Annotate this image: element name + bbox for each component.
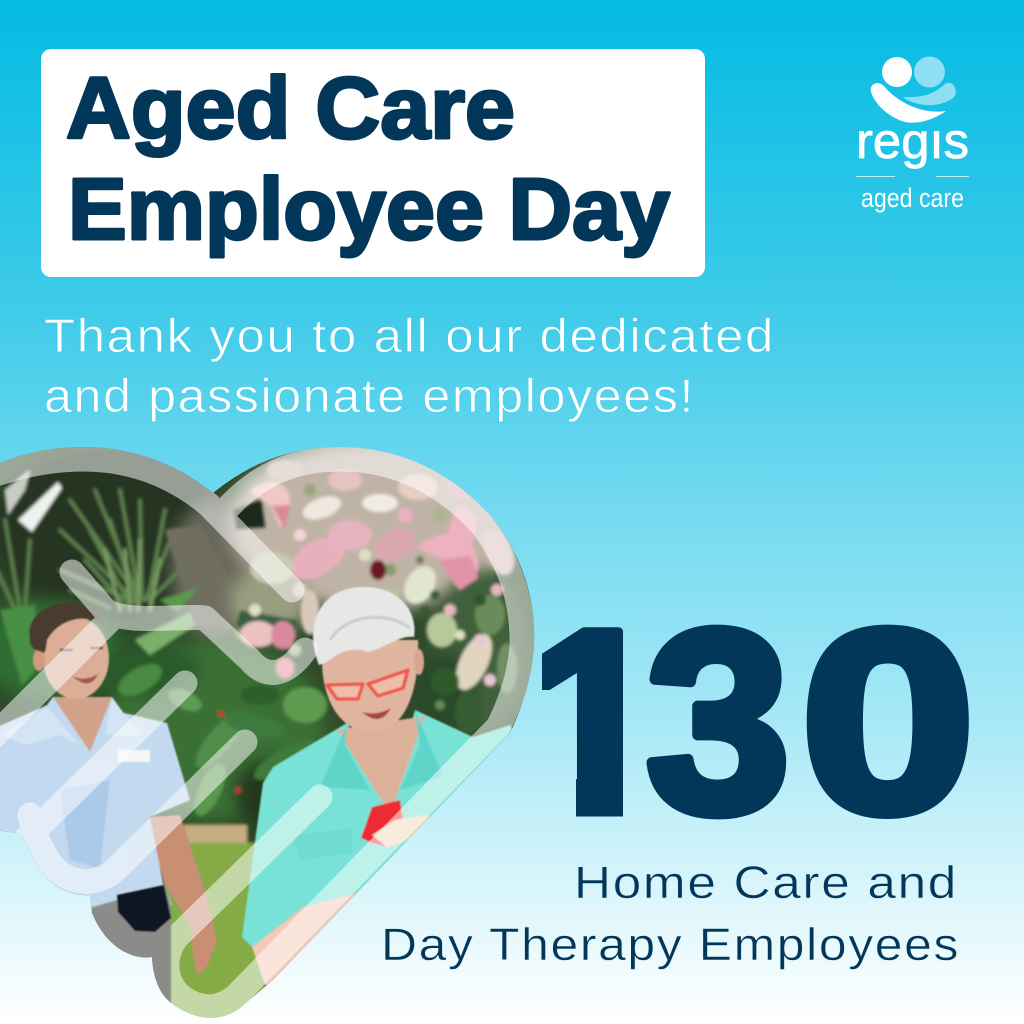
forearm <box>251 892 357 986</box>
small leaves <box>249 468 503 710</box>
large number 130: 0 <box>801 577 975 866</box>
shirt pocket <box>296 830 352 858</box>
title: Aged Care <box>66 60 515 157</box>
palm trunk <box>165 525 242 630</box>
mouth <box>362 708 391 719</box>
grass and garden edge <box>165 843 265 1024</box>
face <box>322 640 418 732</box>
red flower <box>361 800 403 848</box>
big pink leaves <box>240 460 520 734</box>
sky patch <box>18 482 62 532</box>
large number 130: 1 <box>522 577 666 866</box>
wave band <box>72 572 305 672</box>
white hair <box>313 587 415 665</box>
shirt collars <box>320 710 443 790</box>
large number 130 <box>542 624 969 820</box>
blue shirt <box>0 697 190 930</box>
diagonal band two <box>25 683 185 840</box>
employee on the right <box>242 587 520 990</box>
caption <box>381 857 960 970</box>
translucent heart line overlay <box>0 459 522 1007</box>
logo wordmark: regıs <box>856 113 969 169</box>
title: Employee Day <box>68 161 670 258</box>
flowering bush <box>230 440 528 734</box>
icon: two figures embracing <box>871 56 956 123</box>
diagonal band one <box>0 620 110 745</box>
neck <box>337 716 425 804</box>
caption: Day Therapy Employees <box>381 919 960 970</box>
caption: Home Care and <box>574 857 958 908</box>
employee on the left <box>0 603 217 976</box>
title panel <box>41 49 705 277</box>
logo: regis aged care <box>856 56 969 213</box>
palm fronds <box>0 490 190 610</box>
trousers and waist bag <box>90 884 171 1010</box>
subtitle text <box>44 309 775 422</box>
logo lines <box>856 176 969 178</box>
bare arm <box>150 815 217 976</box>
aqua shirt <box>242 710 520 947</box>
large number 130: 3 <box>646 577 790 866</box>
photo background foliage <box>0 440 555 1024</box>
logo tagline: aged care <box>861 183 964 213</box>
glasses <box>327 670 408 699</box>
left lobe band <box>0 459 292 590</box>
subtitle text: Thank you to all our dedicated <box>44 309 775 362</box>
right lobe band and base <box>167 459 522 1007</box>
title <box>66 60 670 258</box>
diagonal band three <box>30 742 245 881</box>
lower garden leaves <box>0 588 327 820</box>
heart photo of two employees in a garden <box>0 440 555 1024</box>
subtitle text: and passionate employees! <box>44 369 695 422</box>
head <box>43 617 109 699</box>
